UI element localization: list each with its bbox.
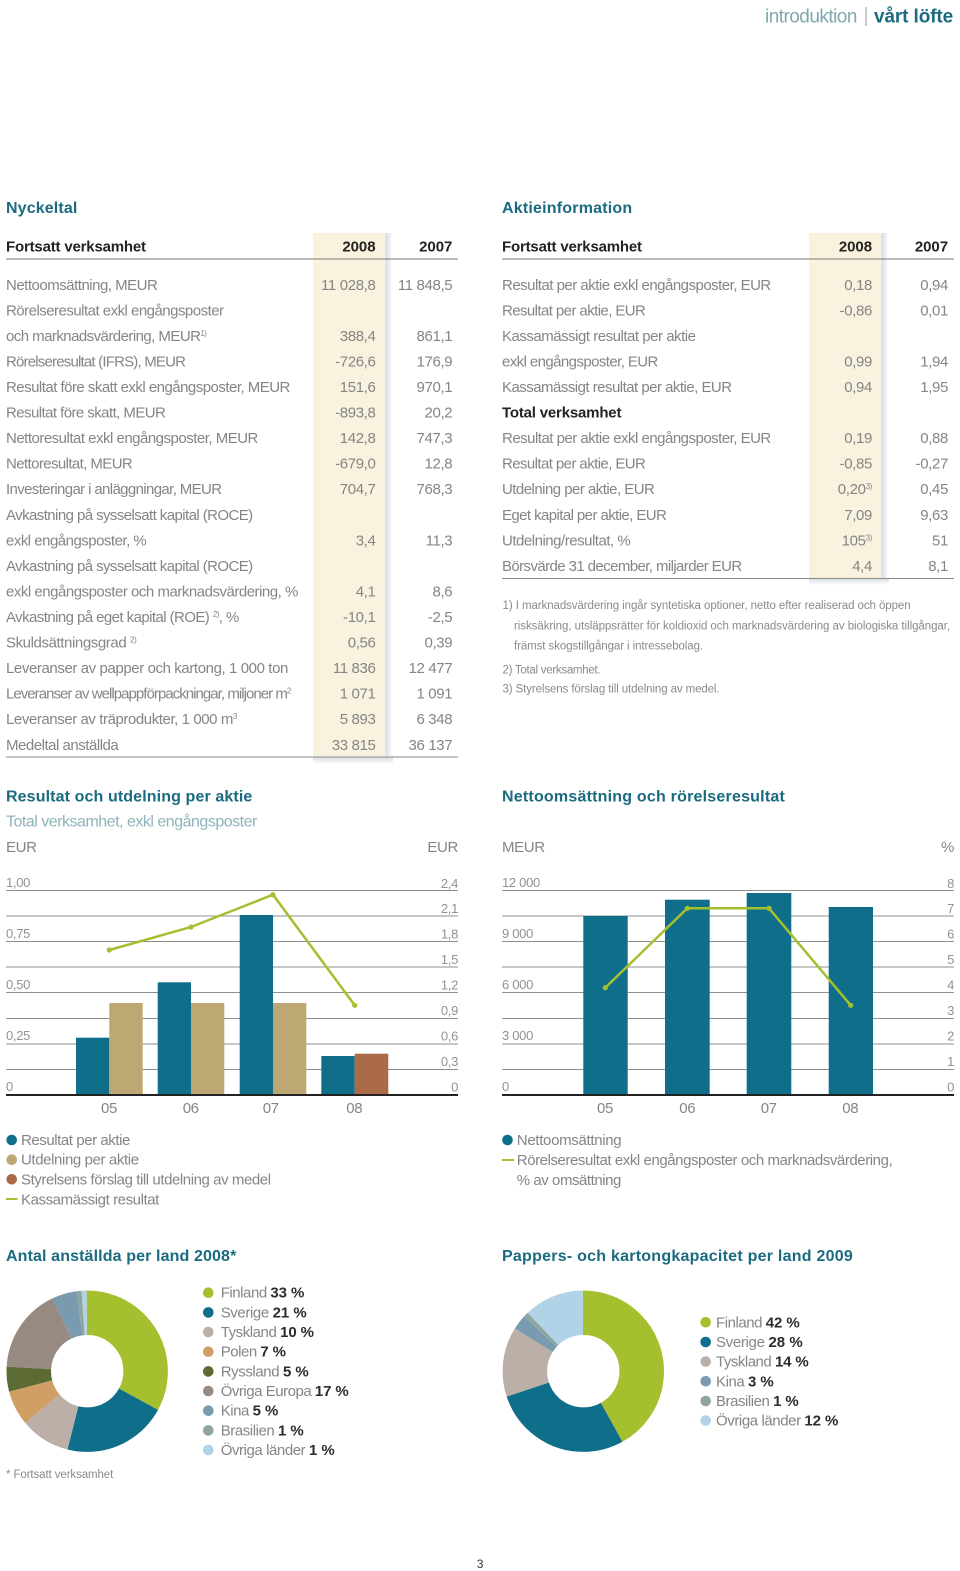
table rows: Rörelseresultat (IFRS), MEUR — [6, 354, 186, 371]
legend: Övriga länder 1 % — [221, 1441, 335, 1459]
bars — [76, 915, 388, 1095]
table rows: 3 — [233, 712, 238, 721]
table header: 2008 — [839, 238, 872, 256]
table rows: -0,85 — [840, 456, 872, 473]
table rows: 3,4 — [356, 532, 376, 549]
table rows: 1 091 — [417, 686, 452, 702]
x axis labels: 08 — [842, 1100, 858, 1117]
legend: Kina 3 % — [716, 1373, 774, 1390]
legend: Utdelning per aktie — [21, 1152, 139, 1168]
panel: Pappers- och kartongkapacitet per land 2009 — [502, 1248, 853, 1430]
heading: Antal anställda per land 2008* — [6, 1248, 237, 1265]
right axis labels: 8 — [947, 876, 954, 891]
table rows: Börsvärde 31 december, miljarder EUR — [502, 558, 742, 575]
header navigation: introduktion — [765, 6, 857, 28]
right axis labels: 1,2 — [441, 978, 458, 992]
x axis labels — [597, 1100, 858, 1117]
left axis labels — [6, 875, 30, 1094]
legend: % av omsättning — [517, 1172, 621, 1189]
highlight column 2008 — [313, 233, 393, 764]
table rows: Nettoresultat, MEUR — [6, 456, 133, 473]
table rows: 0,39 — [425, 634, 452, 651]
axis units: EUR — [6, 839, 37, 856]
table rows: 36 137 — [409, 737, 452, 754]
table rows: 5 893 — [340, 711, 376, 728]
table rows: Leveranser av wellpappförpackningar, miljoner m — [6, 686, 288, 702]
table rows — [502, 277, 954, 579]
legend: Kassamässigt resultat — [21, 1191, 160, 1208]
header navigation — [765, 6, 953, 28]
left axis labels: 6 000 — [502, 977, 533, 992]
legend: Sverige 21 % — [221, 1304, 307, 1321]
table rows: Avkastning på sysselsatt kapital (ROCE) — [6, 507, 253, 524]
heading: Aktieinformation: Aktieinformation — [502, 200, 632, 217]
table rows: Kassamässigt resultat per aktie, EUR — [502, 379, 732, 396]
line: Kassamässigt resultat — [107, 892, 357, 1008]
table rows: 3) — [866, 533, 873, 542]
table rows: Resultat per aktie, EUR — [502, 456, 646, 473]
table rows: Utdelning per aktie, EUR — [502, 481, 655, 498]
table rows: 11 028,8 — [321, 277, 376, 294]
panel: Nettoomsättning och rörelseresultat — [502, 788, 954, 1189]
table rows: Leveranser av papper och kartong, 1 000 ton — [6, 660, 288, 677]
table rows: Resultat per aktie exkl engångsposter, EUR — [502, 430, 771, 447]
table rows: Avkastning på eget kapital (ROE) — [6, 609, 209, 626]
x axis labels: 05 — [101, 1100, 117, 1117]
axis units — [502, 839, 954, 856]
table rows: -679,0 — [335, 456, 376, 473]
footnote: * Fortsatt verksamhet — [6, 1469, 114, 1481]
table rows: Medeltal anställda — [6, 737, 119, 754]
table rows: 1,94 — [920, 354, 948, 371]
right axis labels: 5 — [947, 952, 954, 967]
table rows: Rörelseresultat exkl engångsposter — [6, 302, 224, 320]
panel: Resultat och utdelning per aktie — [6, 788, 459, 1208]
legend: Brasilien 1 % — [716, 1393, 799, 1410]
table rows: -2,5 — [428, 609, 452, 626]
table header: 2007 — [915, 238, 948, 256]
heading: Nettoomsättning och rörelseresultat — [502, 788, 785, 806]
legend: Resultat per aktie — [21, 1132, 130, 1149]
right axis labels: 1,8 — [441, 926, 458, 942]
legend: Rörelseresultat exkl engångsposter och marknadsvärdering, — [517, 1152, 892, 1169]
x axis labels: 06 — [183, 1100, 199, 1117]
table rows — [6, 277, 458, 758]
table rows: 0,18 — [844, 277, 872, 294]
right axis labels: 6 — [947, 926, 954, 942]
panel: Aktieinformation table — [502, 200, 954, 696]
bars — [583, 893, 873, 1095]
footnotes: risksäkring, utsläppsrätter för koldioxid och marknadsvärdering av biologiska tillgångar, — [514, 620, 950, 632]
table rows: 747,3 — [417, 430, 452, 447]
bar and line chart — [502, 875, 954, 1117]
table rows: Total verksamhet — [502, 405, 621, 422]
table rows: 0,94 — [920, 277, 948, 294]
bar and line chart — [6, 875, 458, 1117]
table rows: 12 477 — [409, 660, 452, 677]
table rows: 4,1 — [356, 583, 376, 600]
table rows: 2) — [213, 610, 220, 619]
table header: Fortsatt verksamhet — [502, 238, 642, 256]
table rows: Resultat före skatt exkl engångsposter, MEUR — [6, 379, 291, 396]
x axis labels: 07 — [263, 1100, 279, 1117]
table rows: 704,7 — [340, 481, 376, 498]
legend: Kina 5 % — [221, 1403, 278, 1420]
table rows: Resultat per aktie exkl engångsposter, EUR — [502, 277, 771, 294]
table rows: 2 — [287, 686, 292, 696]
table rows: 33 815 — [332, 737, 376, 754]
table rows: 0,45 — [920, 481, 948, 498]
table rows: 51 — [932, 532, 948, 549]
left axis labels: 0 — [502, 1079, 509, 1094]
legend: Övriga länder 12 % — [716, 1412, 838, 1430]
table rows: 11 848,5 — [398, 277, 452, 294]
table rows: 4,4 — [852, 558, 872, 575]
table rows: 0,99 — [844, 354, 872, 371]
table rows: -893,8 — [335, 405, 376, 422]
right axis labels: 0 — [451, 1080, 458, 1094]
table rows: 0,94 — [844, 379, 872, 396]
table rows: 0,01 — [920, 302, 948, 320]
table rows: 176,9 — [417, 354, 452, 371]
legend: Tyskland 10 % — [221, 1324, 314, 1341]
footnotes: 1) I marknadsvärdering ingår syntetiska optioner, netto efter realiserad och öppen — [502, 600, 910, 612]
footnotes: 3) Styrelsens förslag till utdelning av medel. — [502, 684, 720, 696]
legend: Sverige 28 % — [716, 1334, 803, 1351]
legend — [502, 1132, 892, 1189]
panel: Antal anställda per land 2008 — [6, 1248, 349, 1481]
table rows: 8,6 — [432, 583, 452, 600]
left axis labels: 0,50 — [6, 977, 30, 992]
left axis labels: 0,25 — [6, 1028, 30, 1043]
table rows: Resultat per aktie, EUR — [502, 302, 646, 320]
table rows: Resultat före skatt, MEUR — [6, 405, 166, 422]
table rows: Nettoomsättning, MEUR — [6, 277, 158, 294]
legend — [700, 1314, 838, 1430]
page number: 3 — [477, 1557, 484, 1571]
axis units — [6, 839, 459, 856]
right axis labels: 7 — [947, 901, 954, 916]
table rows: Utdelning/resultat, % — [502, 532, 630, 549]
left axis labels: 0 — [6, 1079, 13, 1094]
right axis labels — [441, 876, 458, 1094]
table rows: 388,4 — [340, 328, 376, 345]
left axis labels: 9 000 — [502, 926, 533, 941]
panel: Nyckeltal table — [6, 200, 458, 764]
table rows: 11 836 — [333, 660, 376, 677]
table rows: exkl engångsposter och marknadsvärdering, % — [6, 583, 298, 600]
table rows: 2) — [130, 635, 137, 644]
table rows: 768,3 — [417, 481, 452, 498]
table rows: 6 348 — [417, 711, 452, 728]
table rows: 142,8 — [340, 430, 376, 447]
legend: Finland 42 % — [716, 1314, 800, 1331]
axis units: MEUR — [502, 839, 545, 856]
x axis labels: 05 — [597, 1100, 613, 1117]
table header: 2007 — [419, 238, 452, 256]
table header: Fortsatt verksamhet — [6, 238, 146, 256]
table rows: 7,09 — [844, 507, 872, 524]
footnotes — [502, 600, 950, 696]
table rows: Leveranser av träprodukter, 1 000 m — [6, 711, 233, 728]
right axis labels: 2,1 — [441, 901, 458, 916]
table rows: Skuldsättningsgrad — [6, 634, 126, 651]
legend: Ryssland 5 % — [221, 1363, 309, 1380]
legend: Nettoomsättning — [517, 1132, 621, 1149]
line: Rörelseresultat — [603, 906, 853, 1008]
axis units: % — [941, 839, 954, 856]
right axis labels: 1 — [947, 1054, 954, 1069]
left axis labels: 0,75 — [6, 926, 30, 941]
heading: Resultat och utdelning per aktie — [6, 788, 252, 806]
table rows: exkl engångsposter, EUR — [502, 354, 659, 371]
left axis labels — [502, 875, 540, 1094]
x axis labels: 06 — [679, 1100, 695, 1117]
right axis labels: 0,9 — [441, 1003, 458, 1018]
legend — [6, 1132, 271, 1208]
legend: Brasilien 1 % — [221, 1422, 304, 1439]
heading: Nyckeltal: Nyckeltal — [6, 200, 78, 217]
table rows: 861,1 — [417, 328, 452, 345]
subheading: Total verksamhet, exkl engångsposter — [6, 813, 258, 831]
right axis labels: 0 — [947, 1080, 954, 1094]
table rows: Nettoresultat exkl engångsposter, MEUR — [6, 430, 259, 447]
table rows: -10,1 — [343, 609, 376, 626]
x axis labels — [101, 1100, 362, 1117]
header navigation: vårt löfte — [874, 6, 953, 28]
right axis labels: 2 — [947, 1028, 954, 1044]
table header — [502, 238, 954, 260]
table rows: -0,86 — [840, 302, 872, 320]
table rows: -0,27 — [916, 456, 948, 473]
right axis labels: 4 — [947, 978, 954, 992]
table rows: exkl engångsposter, % — [6, 532, 146, 549]
axis units: EUR — [427, 839, 459, 856]
table rows: 0,88 — [920, 430, 948, 447]
table header — [6, 238, 458, 260]
table rows: 1 071 — [340, 686, 376, 702]
left axis labels: 3 000 — [502, 1028, 533, 1043]
table rows: 0,56 — [348, 634, 376, 651]
table rows: 0,20 — [838, 481, 866, 498]
table rows: 8,1 — [928, 558, 948, 575]
table rows: -726,6 — [335, 354, 376, 371]
legend: Övriga Europa 17 % — [221, 1382, 349, 1400]
right axis labels: 3 — [947, 1003, 954, 1018]
x axis labels: 07 — [761, 1100, 777, 1117]
right axis labels: 0,3 — [441, 1054, 458, 1069]
table rows: 9,63 — [920, 507, 948, 524]
table rows: 12,8 — [425, 456, 452, 473]
x axis labels: 08 — [346, 1100, 362, 1117]
legend — [203, 1285, 349, 1459]
table rows: , % — [219, 609, 239, 626]
highlight column 2008 — [809, 233, 889, 585]
table rows: 105 — [842, 532, 866, 549]
table rows: Investeringar i anläggningar, MEUR — [6, 481, 222, 498]
legend: Finland 33 % — [221, 1285, 304, 1302]
table rows: Eget kapital per aktie, EUR — [502, 507, 667, 524]
table header: 2008 — [342, 238, 376, 256]
right axis labels: 1,5 — [441, 952, 458, 967]
table rows: 151,6 — [340, 379, 376, 396]
donut chart — [29, 1313, 146, 1430]
left axis labels: 12 000 — [502, 875, 540, 890]
footnotes: 2) Total verksamhet. — [502, 664, 600, 676]
legend: Styrelsens förslag till utdelning av medel — [21, 1171, 271, 1188]
footnotes: främst skogstillgångar i intressebolag. — [514, 640, 703, 652]
donut chart — [525, 1313, 642, 1430]
table rows: Avkastning på sysselsatt kapital (ROCE) — [6, 558, 253, 575]
heading: Pappers- och kartongkapacitet per land 2009 — [502, 1248, 853, 1265]
legend: Polen 7 % — [221, 1344, 286, 1361]
right axis labels: 0,6 — [441, 1028, 458, 1044]
legend: Tyskland 14 % — [716, 1354, 809, 1371]
table rows: och marknadsvärdering, MEUR — [6, 328, 201, 345]
table rows: 0,19 — [844, 430, 872, 447]
table rows: 3) — [866, 482, 873, 491]
table rows: 20,2 — [425, 405, 452, 422]
table rows: 1) — [200, 329, 207, 338]
left axis labels: 1,00 — [6, 875, 30, 890]
table rows: 11,3 — [426, 532, 452, 549]
right axis labels: 2,4 — [441, 876, 458, 891]
right axis labels — [947, 876, 954, 1094]
table rows: 970,1 — [417, 379, 452, 396]
table rows: 1,95 — [920, 379, 948, 396]
table rows: Kassamässigt resultat per aktie — [502, 328, 696, 345]
